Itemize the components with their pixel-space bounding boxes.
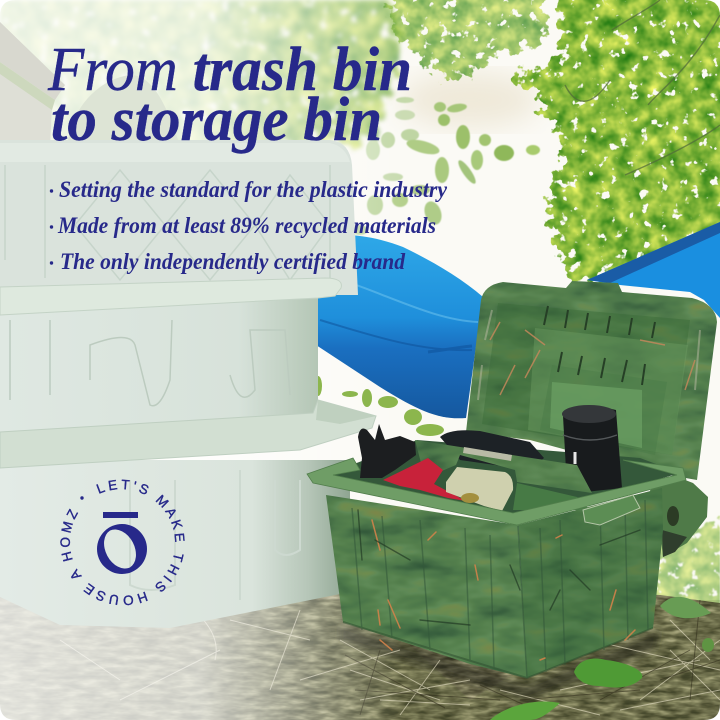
bullet: recycled materials: Made from at least 89% recycled materials bbox=[57, 213, 436, 238]
faded handle and basket bbox=[0, 22, 178, 145]
bin body, front face bbox=[326, 495, 527, 678]
badge ring text: LET'S MAKE THIS HOUSE A HOMZ bbox=[60, 480, 185, 606]
hinge at right side bbox=[650, 478, 708, 557]
beige box bbox=[446, 467, 513, 511]
hinge foot bbox=[662, 530, 687, 557]
bin interior bbox=[325, 440, 680, 520]
faded top bin bbox=[0, 140, 358, 295]
front rim bbox=[307, 458, 686, 525]
black pouch bbox=[440, 430, 544, 470]
vertical ribs on the bin bbox=[343, 500, 653, 678]
heading: From trash bin bbox=[47, 36, 412, 104]
bin body, right face bbox=[518, 488, 663, 678]
bullet: plastic industry standard: Setting the standard for the plastic industry bbox=[59, 177, 448, 202]
hinge hole bbox=[667, 506, 679, 526]
small leaves behind the bin bbox=[314, 376, 444, 436]
logo badge bbox=[60, 480, 185, 606]
blue hammock, right section bbox=[587, 222, 720, 318]
background: foliage at top left bbox=[0, 0, 410, 160]
bullet: certified brand: The only independently certified brand bbox=[60, 249, 405, 274]
logo bar bbox=[103, 512, 138, 518]
logo o mark bbox=[97, 524, 147, 574]
camouflage swirls bbox=[358, 510, 640, 660]
inner compartment divider bbox=[513, 483, 590, 510]
green recycled storage bin bbox=[307, 281, 717, 678]
rim latch bbox=[583, 495, 640, 525]
branch foliage at top centre bbox=[380, 0, 555, 92]
blue hammock, left section bbox=[316, 235, 483, 418]
red tool bbox=[383, 458, 466, 501]
mixed foliage at the right of the bin bbox=[650, 500, 720, 630]
corner shading on bin bbox=[518, 488, 663, 678]
gloves bbox=[358, 424, 416, 478]
faded bottom bin bbox=[0, 400, 376, 628]
background: water shimmer bbox=[400, 72, 540, 128]
grater strip on the divider bbox=[463, 447, 512, 461]
scattered leaves on the middle branch bbox=[352, 97, 540, 235]
badge dot bbox=[80, 496, 84, 500]
hammock folds bbox=[320, 275, 478, 352]
green plants on the ground bbox=[307, 575, 714, 720]
heading second line: to storage bin bbox=[51, 86, 382, 154]
faded middle bin bbox=[0, 278, 341, 432]
faded stacked bins bbox=[0, 22, 376, 628]
inner divider wall of the bin bbox=[415, 440, 592, 493]
bin lid, open bbox=[466, 281, 717, 480]
black thermos bbox=[562, 405, 622, 492]
ground: grass and twigs bbox=[0, 580, 720, 720]
tree branches bbox=[565, 0, 720, 175]
tree canopy at top right bbox=[500, 0, 720, 295]
